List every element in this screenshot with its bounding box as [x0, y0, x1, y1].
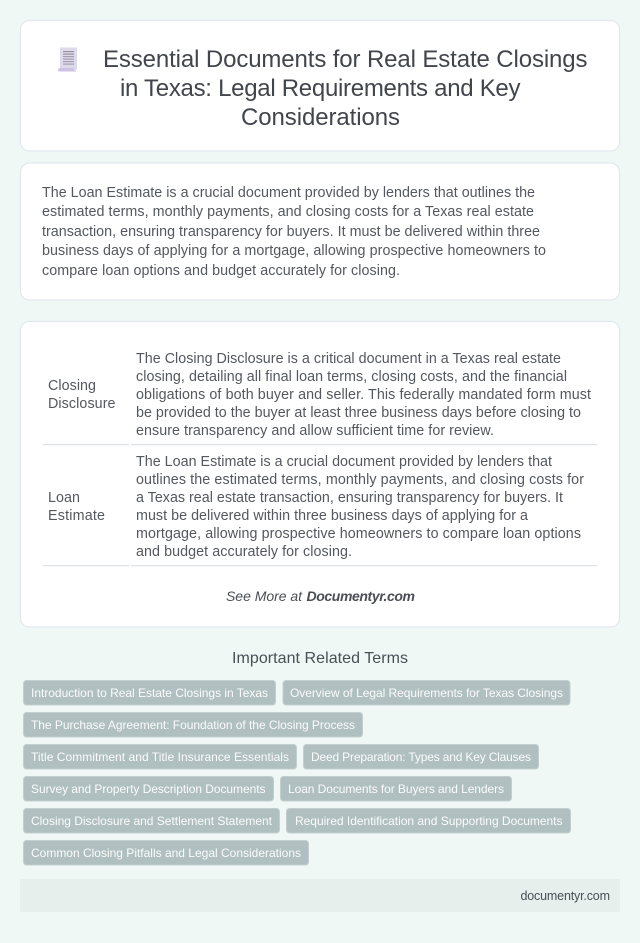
intro paragraph: compare loan options and budget accurately for closing. — [42, 263, 400, 279]
table row: Loan Estimate: a Texas real estate transaction, ensuring transparency for buyers. It — [136, 490, 563, 506]
tag: The Purchase Agreement: Foundation of the Closing Process — [31, 718, 355, 732]
tag — [24, 680, 276, 705]
tag — [24, 776, 274, 801]
tag: Survey and Property Description Documents — [31, 782, 266, 796]
table row: Closing Disclosure — [43, 351, 597, 445]
footer: documentyr.com — [520, 889, 610, 903]
table row: Loan Estimate: The Loan Estimate is a crucial document provided by lenders that — [136, 454, 552, 470]
panel: terms table — [20, 322, 620, 627]
table row: Closing Disclosure: Closing — [48, 378, 96, 394]
table row: Loan Estimate: must be delivered within three business days of applying for a — [136, 508, 528, 524]
see more link: See More at — [226, 588, 303, 604]
tag — [280, 776, 512, 801]
tag: Title Commitment and Title Insurance Essentials — [31, 750, 289, 764]
intro paragraph: transaction, ensuring transparency for buyers. It must be delivered within three — [42, 224, 540, 240]
panel: intro text — [20, 163, 620, 300]
tag: Closing Disclosure and Settlement Statement — [31, 814, 273, 828]
table row: Loan Estimate — [43, 454, 597, 566]
tag — [304, 744, 538, 769]
icon: document — [58, 48, 77, 72]
table row: Closing Disclosure: ensure transparency and allow sufficient time for review. — [136, 423, 494, 439]
tag: Loan Documents for Buyers and Lenders — [288, 782, 504, 796]
tag: Deed Preparation: Types and Key Clauses — [311, 750, 531, 764]
tag: Overview of Legal Requirements for Texas Closings — [290, 686, 563, 700]
tag — [24, 840, 308, 865]
title: in Texas: Legal Requirements and Key — [120, 75, 520, 102]
table row: Loan Estimate: Estimate — [48, 508, 105, 524]
table row: Closing Disclosure: closing, detailing all final loan terms, closing costs, and the financial — [136, 369, 567, 385]
title: Essential Documents for Real Estate Closings — [103, 46, 588, 73]
table row: Closing Disclosure: obligations of both buyer and seller. This federally mandated form must — [136, 387, 591, 403]
heading: related terms: Important Related Terms — [232, 650, 408, 667]
title: Considerations — [241, 104, 400, 131]
tag — [286, 808, 570, 833]
table row: Closing Disclosure: Disclosure — [48, 396, 116, 412]
intro paragraph: estimated terms, monthly payments, and closing costs for a Texas real estate — [42, 204, 534, 220]
title — [103, 46, 588, 131]
table row: Closing Disclosure: be provided to the buyer at least three business days before closing to — [136, 405, 581, 421]
table row: Loan Estimate: and budget accurately for closing. — [136, 544, 352, 560]
tag — [24, 744, 296, 769]
tag: Required Identification and Supporting Documents — [295, 814, 562, 828]
tag — [24, 712, 362, 737]
see more link — [226, 588, 415, 604]
intro paragraph — [42, 185, 546, 279]
tag: Introduction to Real Estate Closings in Texas — [31, 686, 268, 700]
table row: Loan Estimate: Loan — [48, 490, 80, 506]
intro paragraph: The Loan Estimate is a crucial document provided by lenders that outlines the — [42, 185, 535, 201]
footer — [20, 879, 620, 912]
related term tags — [24, 680, 570, 865]
tag — [283, 680, 570, 705]
panel: title header — [20, 20, 620, 151]
intro paragraph: business days of applying for a mortgage, allowing prospective homeowners to — [42, 243, 546, 259]
tag: Common Closing Pitfalls and Legal Considerations — [31, 846, 301, 860]
table row: Loan Estimate: mortgage, allowing prospective homeowners to compare loan options — [136, 526, 581, 542]
table row: Closing Disclosure: The Closing Disclosure is a critical document in a Texas real estate — [136, 351, 561, 367]
see more link: Documentyr.com — [306, 588, 415, 604]
table row: Loan Estimate: outlines the estimated terms, monthly payments, and closing costs for — [136, 472, 584, 488]
tag — [24, 808, 280, 833]
